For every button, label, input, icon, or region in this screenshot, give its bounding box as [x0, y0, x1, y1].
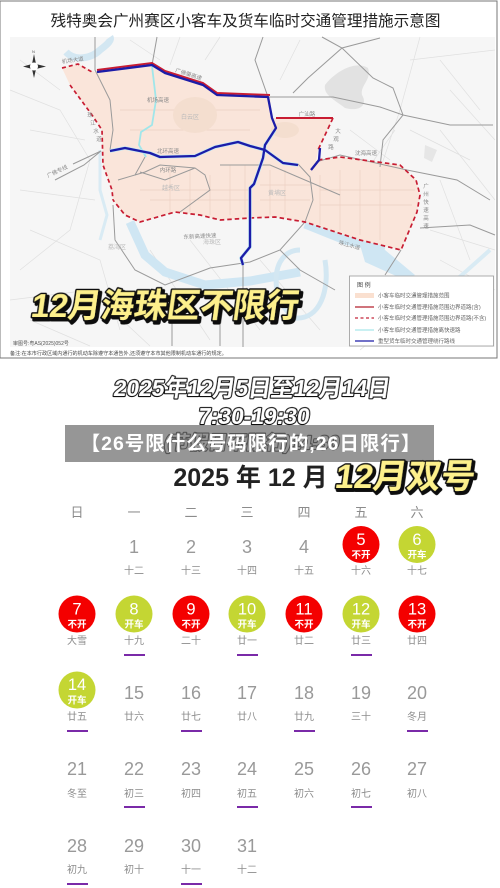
calendar row 4: 22: [124, 759, 144, 779]
calendar row 2: 开车: [124, 618, 144, 630]
calendar row 2: 9: [186, 600, 196, 618]
calendar row 5: 28: [67, 836, 87, 856]
calendar row 1: 4: [299, 537, 309, 557]
hidden caption behind banner: (节假日不限行)14:30: [163, 432, 341, 454]
map labels: 荔湾区: [108, 243, 126, 251]
weekday header: 一: [127, 505, 141, 520]
calendar row 4: 23: [181, 759, 201, 779]
overlay caption: even numbers: 12月双号: [335, 460, 480, 498]
calendar row 2: 7: [72, 600, 82, 618]
calendar row 2: 8: [129, 600, 139, 618]
calendar row 3: 18: [294, 683, 314, 703]
calendar row 1: 1: [129, 537, 139, 557]
calendar row 3: 15: [124, 683, 144, 703]
calendar row 4: 27: [407, 759, 427, 779]
calendar row 1: 十四: [237, 564, 257, 577]
map labels: 海珠区: [203, 238, 221, 246]
legend: 小客车临时交通管理措施离快速路: [378, 326, 461, 334]
boundary: red dashed west: [62, 64, 113, 200]
calendar row 2: 开车: [351, 618, 371, 630]
map labels: 黄埔区: [268, 189, 286, 197]
legend: 重型货车临时交通管理绕行路线: [378, 337, 456, 345]
map labels: 水: [93, 127, 99, 135]
calendar row 1: 开车: [407, 549, 427, 561]
calendar row 1: 十七: [407, 564, 427, 577]
calendar row 5: 31: [237, 836, 257, 856]
calendar row 2: 廿三: [351, 635, 371, 647]
calendar row 3: 三十: [351, 710, 371, 723]
weekday header: 日: [70, 505, 84, 520]
map labels: 高: [423, 214, 429, 222]
calendar row 2: [58, 596, 436, 656]
weekday header: 三: [240, 505, 254, 520]
weekday header: 二: [184, 505, 198, 520]
map labels: 珠: [87, 111, 93, 119]
map labels: 州: [423, 192, 429, 198]
gray lakes: [325, 65, 437, 162]
weekday header: 六: [410, 505, 424, 520]
calendar row 3: 冬月: [407, 710, 427, 723]
map labels: 东新高速快速: [183, 231, 217, 241]
map labels: 广佛专线: [45, 163, 69, 179]
map labels: 北环高速: [157, 147, 179, 155]
calendar row 5: [67, 836, 257, 885]
calendar row 1: 不开: [351, 550, 371, 561]
zone texture: [120, 97, 415, 240]
calendar row 2: 不开: [67, 620, 87, 630]
map labels: 路: [328, 143, 334, 151]
overlay caption: Haizhu no restriction: 12月海珠区不限行: [29, 288, 302, 325]
road: light blue expressway: [139, 66, 156, 157]
map title: 残特奥会广州赛区小客车及货车临时交通管理措施示意图: [51, 11, 440, 30]
calendar row 2: 开车: [237, 618, 257, 630]
map labels: 大: [335, 127, 341, 135]
calendar row 2: 廿一: [237, 635, 257, 647]
calendar row 2: 13: [408, 600, 426, 618]
map labels: 机场大道: [61, 54, 85, 66]
calendar row 3: 廿八: [237, 711, 257, 723]
truck route: blue: [97, 65, 320, 265]
map labels: 越秀区: [162, 184, 180, 192]
map labels: 白云区: [181, 113, 199, 121]
map labels: [45, 54, 429, 252]
calendar row 3: 14: [68, 676, 86, 694]
calendar row 1: 十五: [294, 564, 314, 577]
date range caption: 2025年12月5日至12月14日: [112, 375, 392, 401]
calendar row 5: 十二: [237, 863, 257, 876]
legend: 小客车临时交通管理措施范围: [378, 292, 450, 300]
rivers: [66, 37, 490, 318]
calendar row 5: 初九: [67, 863, 87, 876]
calendar row 5: 十一: [181, 863, 201, 876]
calendar row 4: 26: [351, 759, 371, 779]
calendar row 3: 廿六: [124, 711, 144, 723]
calendar row 1: 5: [356, 531, 366, 549]
banner: 【26号限什么号码限行的,26日限行】: [81, 433, 421, 455]
calendar row 2: 廿二: [294, 635, 314, 647]
calendar row 3: 廿七: [181, 711, 201, 723]
calendar row 4: [67, 759, 427, 808]
calendar row 3: 20: [407, 683, 427, 703]
calendar row 5: 初十: [124, 863, 144, 876]
boundary: red solid: [97, 63, 333, 118]
map labels: 广汕路: [299, 110, 316, 118]
calendar row 2: 不开: [294, 620, 314, 630]
calendar row 3: 廿五: [67, 711, 87, 723]
map frame: [0, 1, 497, 358]
legend: 小客车临时交通管理措施范围边界道路(含): [378, 303, 481, 311]
map labels: 速: [423, 223, 429, 230]
map labels: 江: [90, 120, 96, 127]
calendar row 3: 16: [181, 683, 201, 703]
legend: 小客车临时交通管理措施范围边界道路(不含): [378, 314, 486, 322]
calendar row 2: 10: [238, 600, 256, 618]
calendar row 2: 廿四: [407, 635, 427, 647]
banner: [65, 425, 434, 462]
weekday header: [70, 505, 424, 520]
map labels: 广: [423, 182, 429, 190]
calendar row 1: 2: [186, 537, 196, 557]
calendar row 1: [124, 526, 436, 577]
compass: [23, 49, 46, 78]
calendar row 3: 17: [237, 683, 257, 703]
calendar row 4: 21: [67, 759, 87, 779]
calendar row 2: 11: [295, 600, 313, 618]
calendar row 4: 初五: [237, 787, 257, 800]
calendar row 4: 初四: [181, 787, 201, 800]
restricted zone: [62, 64, 420, 250]
map labels: 速: [423, 207, 429, 214]
calendar row 1: 十六: [351, 564, 371, 577]
calendar row 2: 不开: [181, 620, 201, 630]
map labels: 广佛肇高速: [174, 66, 203, 82]
compass: N: [32, 49, 35, 54]
calendar row 3: 开车: [67, 694, 87, 706]
weekday header: 五: [354, 505, 368, 520]
legend: 图 例: [357, 281, 371, 289]
map labels: 机场高速: [147, 96, 169, 104]
map labels: 快: [423, 198, 429, 206]
road network: [55, 37, 495, 347]
calendar row 4: 初七: [351, 787, 371, 800]
map: [10, 37, 495, 350]
calendar row 1: 十二: [124, 564, 144, 577]
map labels: 道: [96, 135, 102, 143]
calendar row 2: 12: [352, 600, 370, 618]
calendar row 4: 初三: [124, 787, 144, 800]
calendar row 4: 25: [294, 759, 314, 779]
map approval number: 审图号:粤AS(2025)052号: [13, 340, 69, 347]
calendar row 2: 大雪: [67, 634, 87, 647]
calendar row 3: [58, 672, 428, 732]
calendar row 1: 3: [242, 537, 252, 557]
calendar row 1: 6: [412, 531, 422, 549]
boundary: red dashed east and south: [113, 118, 420, 250]
legend: [350, 276, 494, 346]
calendar row 2: 十九: [124, 634, 144, 647]
overlay caption: even numbers: 12月双号: [333, 458, 478, 496]
calendar row 4: 初六: [294, 787, 314, 800]
calendar row 4: 24: [237, 759, 257, 779]
calendar row 4: 初八: [407, 787, 427, 800]
map labels: 沈海高速: [355, 149, 377, 157]
calendar row 3: 廿九: [294, 711, 314, 723]
calendar row 4: 冬至: [67, 787, 87, 800]
time caption: 7:30-19:30: [197, 403, 312, 429]
map labels: 珠江水道: [338, 238, 362, 252]
calendar month heading: 2025 年 12 月: [173, 464, 328, 492]
calendar row 5: 29: [124, 836, 144, 856]
calendar row 2: 二十: [181, 634, 201, 647]
calendar row 3: 19: [351, 683, 371, 703]
overlay caption: Haizhu no restriction: 12月海珠区不限行: [31, 291, 304, 327]
calendar row 2: 不开: [407, 620, 427, 630]
calendar row 5: 30: [181, 836, 201, 856]
map labels: 内环路: [160, 166, 177, 174]
weekday header: 四: [297, 505, 311, 520]
map labels: 观: [333, 136, 339, 143]
calendar row 1: 十三: [181, 564, 201, 577]
footnote: 备注:在本市行政区域内通行的机动车除遵守本通告外,还须遵守本市其他限制机动车通行的规定。: [10, 350, 227, 357]
